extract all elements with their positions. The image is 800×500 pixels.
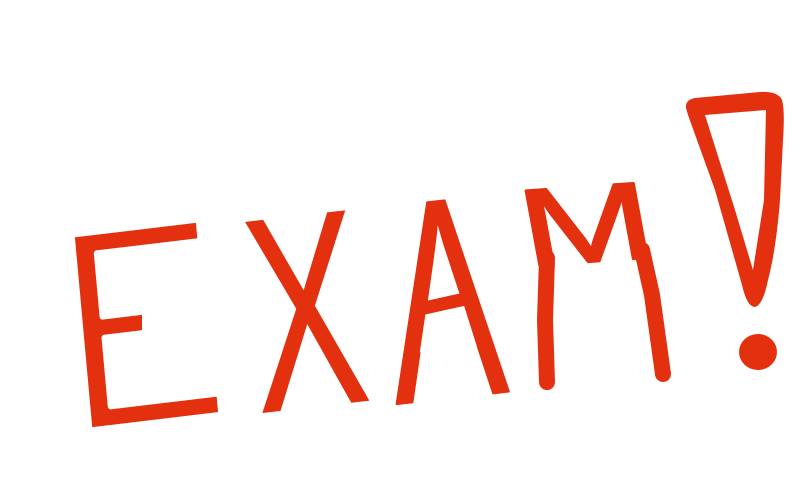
exclamation mark [686, 92, 784, 370]
title: hand-lettered EXAM! [74, 92, 784, 428]
letter M: M [509, 159, 664, 290]
letter A: A [373, 134, 515, 464]
letter M [509, 159, 664, 382]
letter X: X [232, 150, 379, 472]
letter E: E [47, 156, 237, 494]
